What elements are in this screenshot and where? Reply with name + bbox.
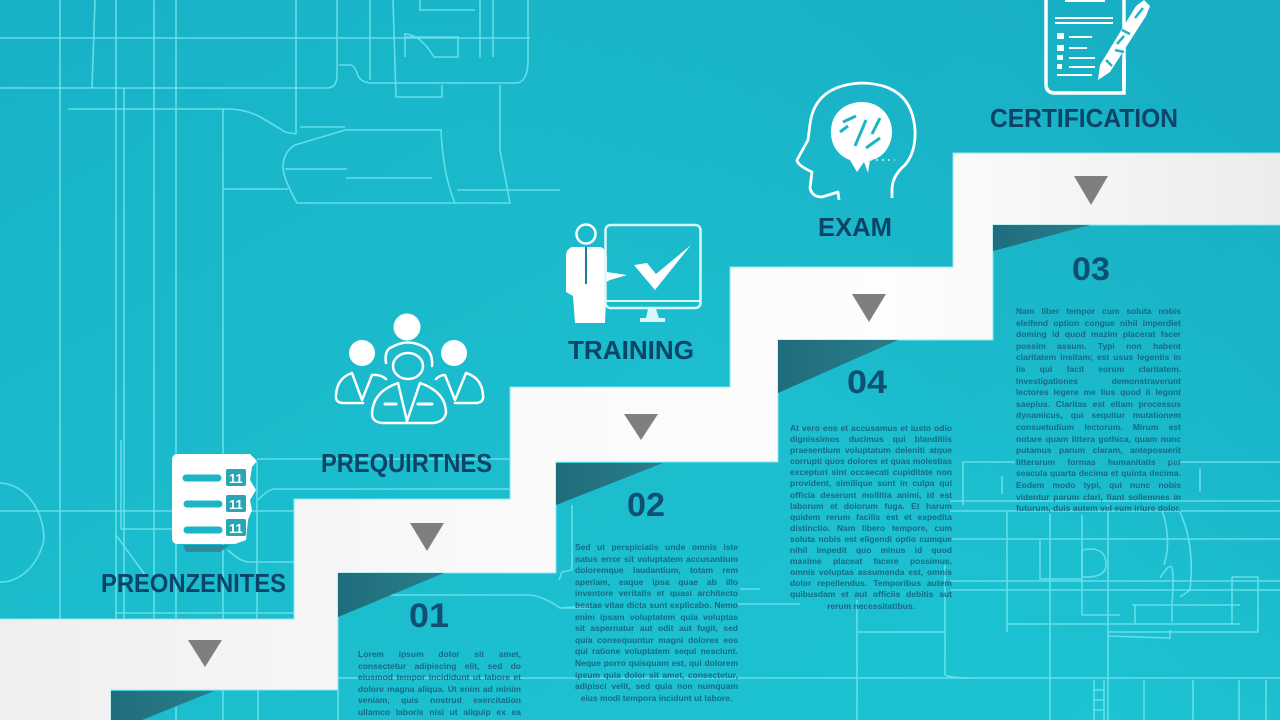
- text block: step 02: Sed ut perspiciatis unde omnis iste natus error sit voluptatem accusantium doloremque laudantium, totam rem aperiam, eaque ipsa quae ab illo inventore veritatis et quasi architecto beatae vitae dicta sunt explicabo. Nemo enim ipsam voluptatem quia voluptas sit aspernatur aut odit aut fugit, sed quia consequuntur magni dolores eos qui ratione voluptatem sequi nesciunt. Neque porro quisquam est, qui dolorem ipsum quia dolor sit amet, consectetur, adipisci velit, sed quia non numquam eius modi tempora incidunt ut labore.: [575, 542, 738, 703]
- icon: checklist: 11: [229, 471, 243, 486]
- icon: head with brain: [797, 83, 915, 200]
- label: exam title: EXAM: [818, 212, 892, 242]
- label: training title: TRAINING: [568, 335, 694, 365]
- icon: checklist: [172, 454, 257, 552]
- step number 04: 04: [847, 364, 887, 400]
- step number 03: 03: [1072, 251, 1110, 287]
- icon: team of people: [336, 314, 483, 423]
- icon: checklist: 11: [229, 497, 243, 512]
- icon: trainer with screen and check mark: [566, 224, 700, 323]
- icon: checklist: 11: [229, 521, 243, 536]
- step number 02: 02: [627, 486, 665, 523]
- icon: clipboard document and pen: [1046, 0, 1150, 93]
- staircase band: [0, 153, 1280, 720]
- label: first step title: PREONZENITES: [101, 568, 286, 598]
- step accents: dark triangles: [111, 225, 1090, 720]
- text block: step 03: Nam liber tempor cum soluta nobis eleifend option congue nihil imperdiet doming id quod mazim placerat facer possim assum. Typi non habent claritatem insitam; est usus legentis in iis qui facit eorum claritatem. Investigationes demonstraverunt lectores legere me lius quod ii legunt saepius. Claritas est etiam processus dynamicus, qui sequitur mutationem consuetudium lectorum. Mirum est notare quam littera gothica, quam nunc putamus parum claram, anteposuerit litterarum formas humanitatis per seacula quarta decima et quinta decima. Eodem modo typi, qui nunc nobis videntur parum clari, fiant sollemnes in futurum, duis autem vel eum iriure dolor.: [1016, 306, 1181, 513]
- text block: step 04: At vero eos et accusamus et iusto odio dignissimos ducimus qui blanditiis praesentium voluptatum deleniti atque corrupti quos dolores et quas molestias excepturi sint occaecati cupiditate non provident, similique sunt in culpa qui officia deserunt mollitia animi, id est laborum et dolorum fuga. Et harum quidem rerum facilis est et expedita distinctio. Nam libero tempore, cum soluta nobis est eligendi optio cumque nihil impedit quo minus id quod maxime placeat facere possimus, omnis voluptas assumenda est, omnis dolor repellendus. Temporibus autem quibusdam et aut officiis debitis aut rerum necessitatibus.: [790, 423, 952, 610]
- label: second step title: PREQUIRTNES: [321, 448, 492, 478]
- step number 01: 01: [409, 597, 449, 635]
- step arrows: grey down triangles: [188, 176, 1108, 667]
- label: certification title: CERTIFICATION: [990, 103, 1178, 133]
